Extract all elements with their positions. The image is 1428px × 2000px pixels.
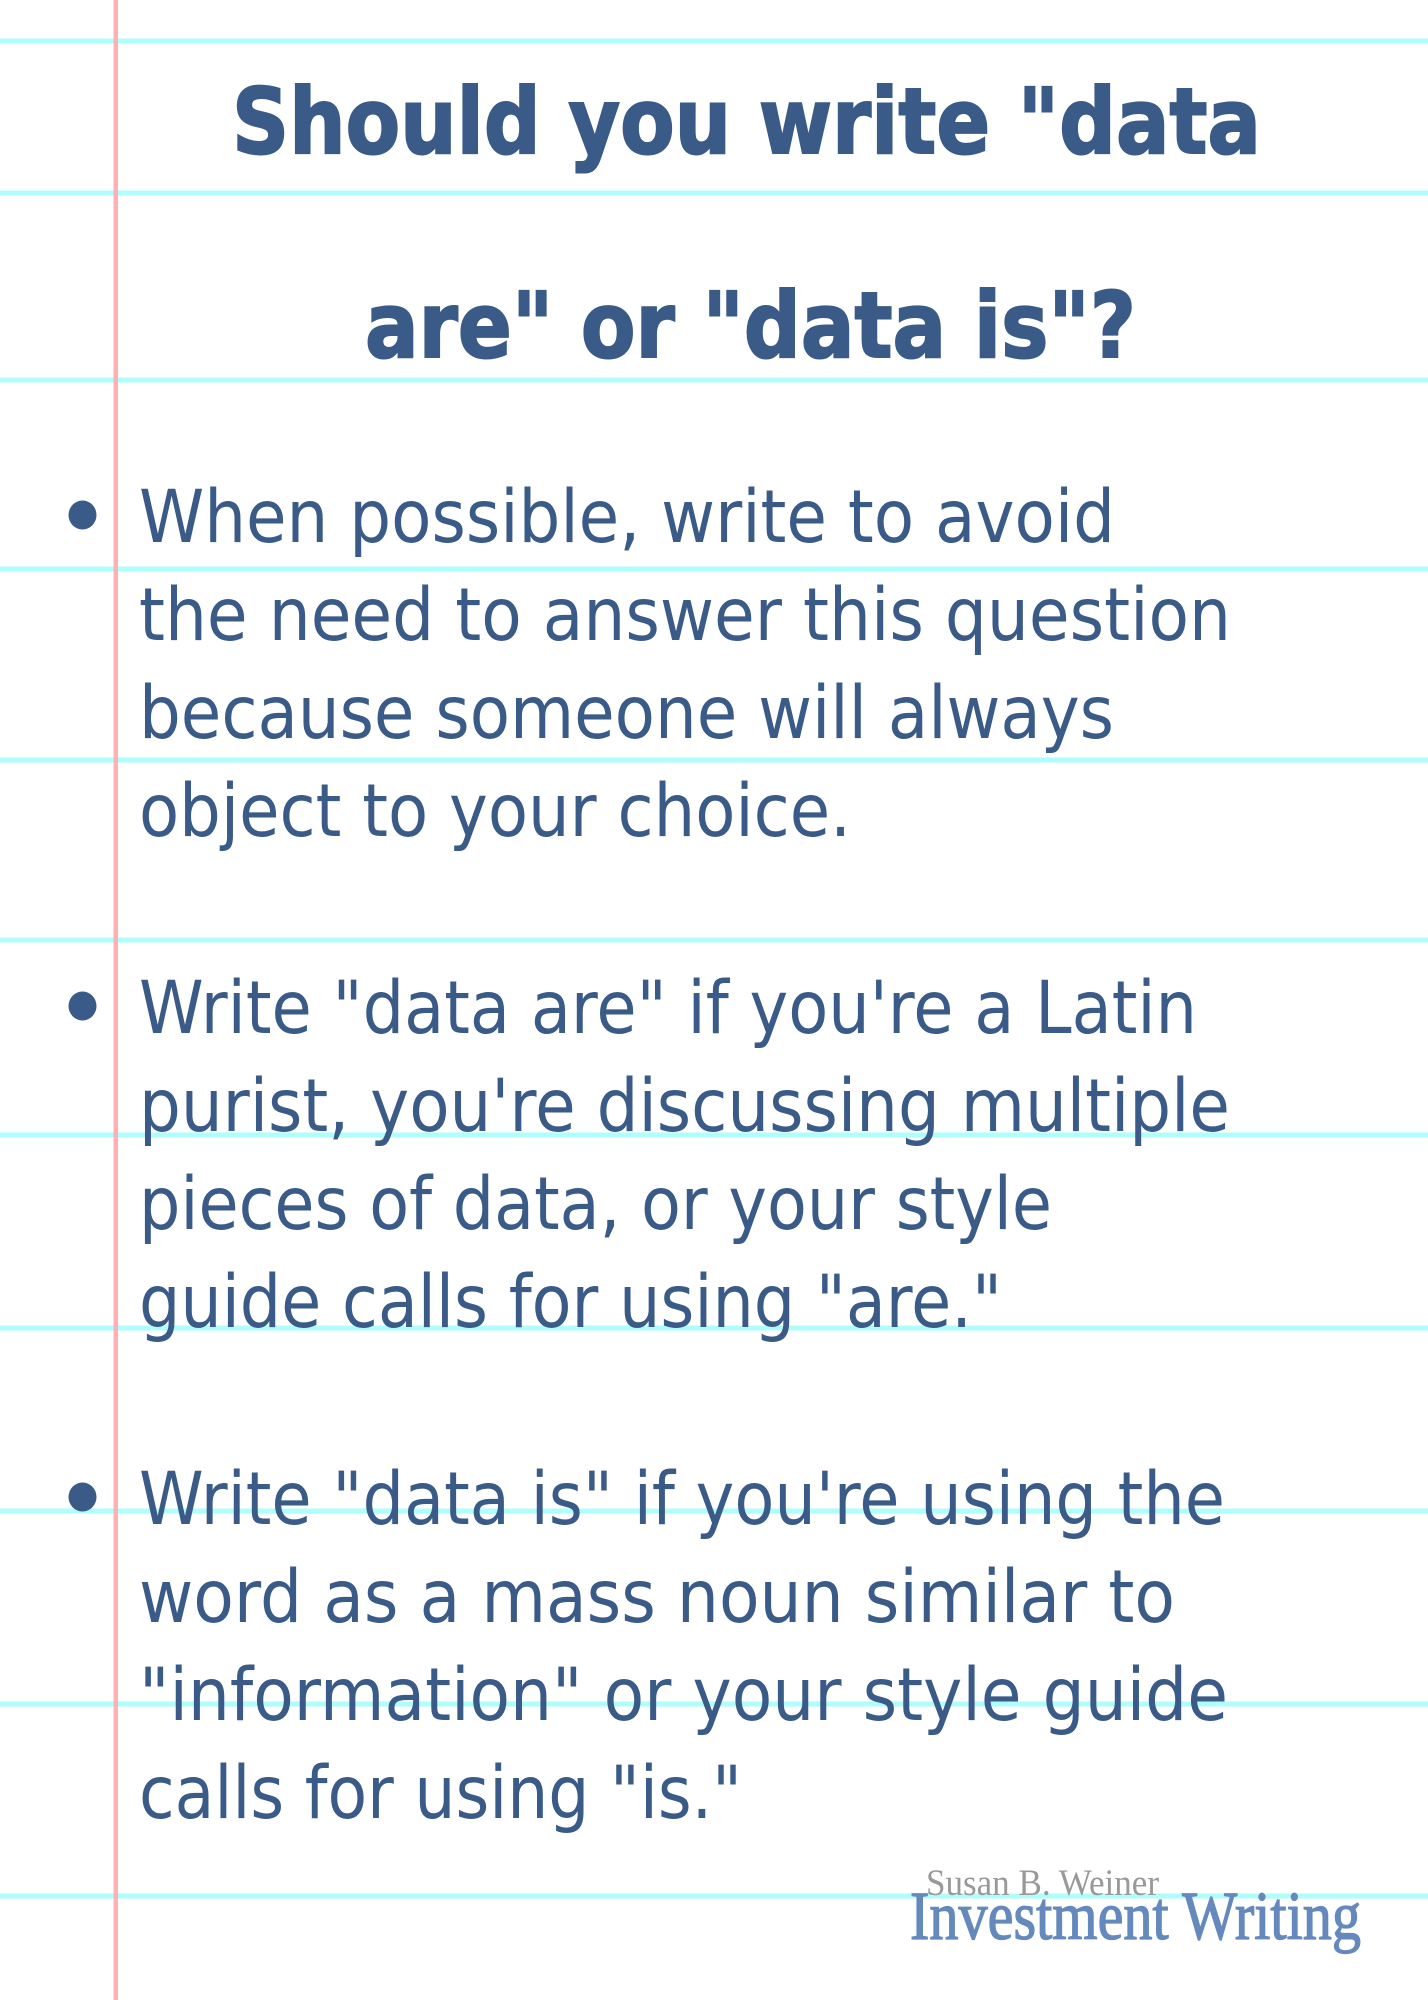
bullet 3: write data is: calls for using "is." xyxy=(139,1751,742,1836)
bullet 1: avoid the question: When possible, write to avoid xyxy=(139,475,1115,560)
icon: bullet dot xyxy=(68,500,96,530)
icon: bullet dot xyxy=(68,1482,96,1512)
icon: bullet dot xyxy=(68,992,96,1020)
title xyxy=(232,70,1261,379)
logo: Susan B. Weiner Investment Writing: Susan B. Weiner xyxy=(926,1863,1159,1904)
title: Should you write "data xyxy=(232,70,1261,175)
bullet 1: avoid the question: the need to answer this question xyxy=(139,573,1231,658)
bullet 1: avoid the question xyxy=(68,475,1231,854)
bullet 2: write data are xyxy=(68,966,1230,1345)
bullet 2: write data are: Write "data are" if you're a Latin xyxy=(139,966,1197,1051)
bullet 3: write data is: Write "data is" if you're using the xyxy=(139,1457,1225,1542)
bullet 2: write data are: purist, you're discussing multiple xyxy=(139,1064,1230,1149)
bullet 3: write data is: word as a mass noun similar to xyxy=(139,1555,1175,1640)
bullet 3: write data is: "information" or your style guide xyxy=(139,1653,1228,1738)
bullet 3: write data is xyxy=(68,1457,1228,1836)
bullet 1: avoid the question: because someone will always xyxy=(139,671,1114,756)
bullet 2: write data are: pieces of data, or your style xyxy=(139,1162,1052,1247)
bullet 1: avoid the question: object to your choice. xyxy=(139,769,851,854)
bullet 2: write data are: guide calls for using "are." xyxy=(139,1260,1002,1345)
title: are" or "data is"? xyxy=(365,274,1136,379)
